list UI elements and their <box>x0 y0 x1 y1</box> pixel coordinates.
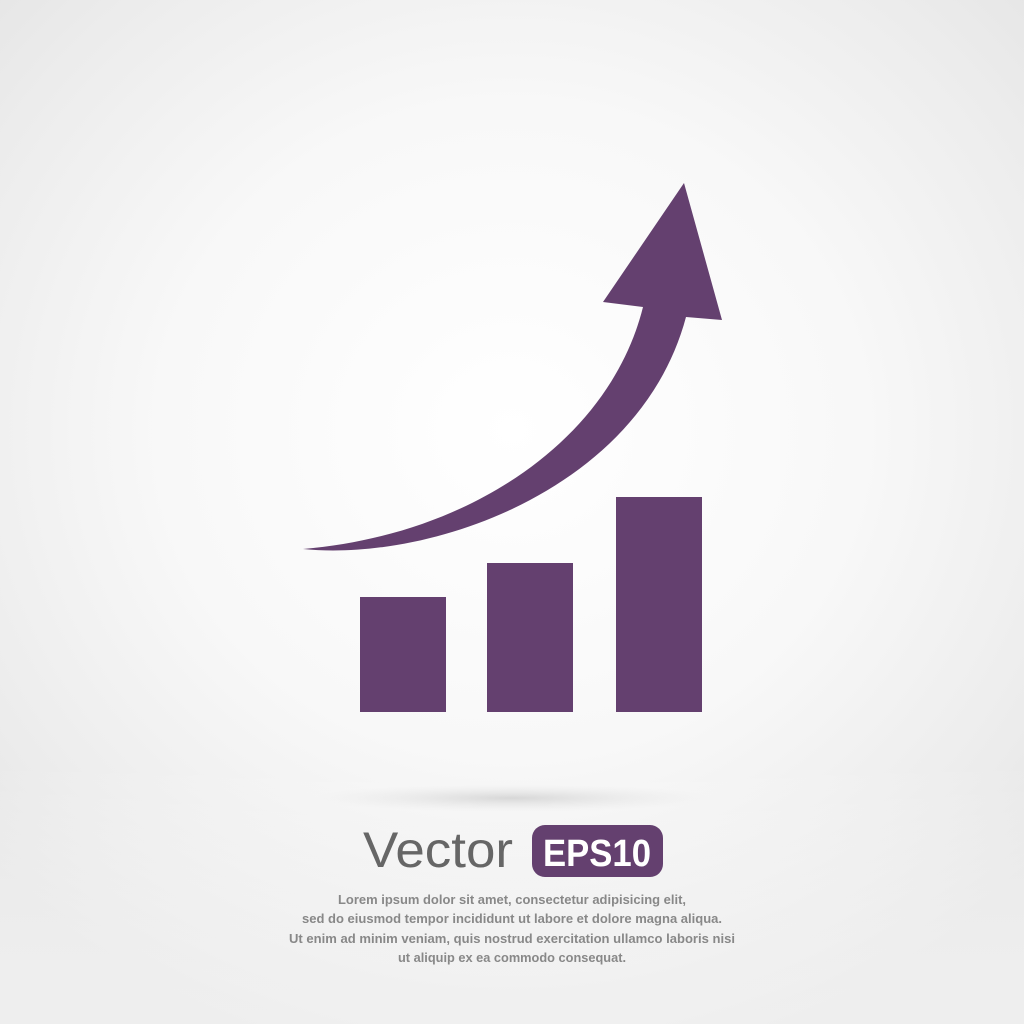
bar 1 <box>360 597 446 712</box>
body text: sed do eiusmod tempor incididunt ut labore et dolore magna aliqua. <box>302 911 722 926</box>
bar 2 <box>487 563 573 712</box>
body text: Lorem ipsum dolor sit amet, consectetur adipisicing elit, <box>338 892 686 907</box>
arrow <box>303 183 722 550</box>
body text <box>289 892 735 965</box>
body text: ut aliquip ex ea commodo consequat. <box>398 950 626 965</box>
bar 3 <box>616 497 702 712</box>
shadow under chart <box>312 784 712 812</box>
title: Vector: Vector <box>363 822 513 878</box>
body text: Ut enim ad minim veniam, quis nostrud exercitation ullamco laboris nisi <box>289 931 735 946</box>
icon: growth chart <box>303 183 722 712</box>
badge: EPS10: EPS10 <box>543 833 651 875</box>
